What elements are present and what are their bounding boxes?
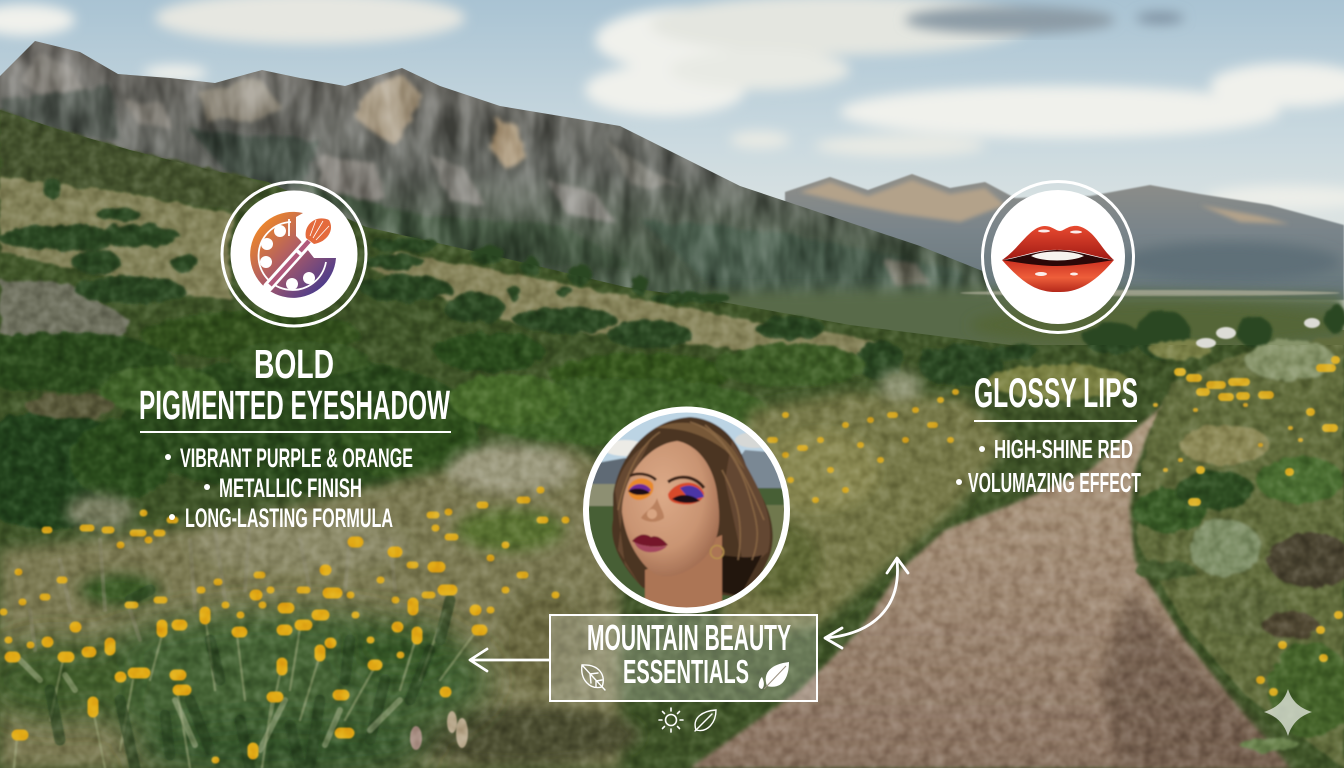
neck and shoulder (645, 535, 722, 618)
sky (0, 0, 1344, 330)
bullet list: eyeshadow features (165, 443, 413, 533)
dried seed pods (410, 711, 468, 750)
hair strands (618, 422, 764, 560)
flower plant stems and leaves (14, 520, 477, 768)
arrow: pointing left to the meadow (470, 649, 549, 671)
bullet list: eyeshadow features: METALLIC FINISH (219, 473, 362, 503)
eyeshadow (628, 478, 653, 500)
heading: bold pigmented eyeshadow: PIGMENTED EYESHADOW (139, 382, 450, 428)
panel: bold pigmented eyeshadow (139, 182, 451, 533)
lips (632, 534, 668, 547)
right bank vegetation (1132, 335, 1344, 768)
main mountain range (0, 41, 986, 302)
bullet list: lip features (956, 434, 1141, 498)
bullet list: lip features: HIGH-SHINE RED (994, 434, 1133, 464)
icon: outline leaf (582, 665, 605, 690)
icon: glossy red lips (982, 182, 1134, 332)
bullet list: eyeshadow features: VIBRANT PURPLE & ORANGE (180, 443, 413, 473)
village houses (1196, 318, 1320, 348)
nose (641, 498, 664, 522)
icon: small outline leaf (695, 710, 716, 731)
title text: ESSENTIALS (623, 653, 749, 690)
icon: makeup palette and brush (222, 182, 366, 326)
heading: bold pigmented eyeshadow (139, 341, 450, 428)
bullet list: eyeshadow features: LONG-LASTING FORMULA (185, 503, 393, 533)
hair (612, 417, 773, 596)
bullet list: lip features: VOLUMAZING EFFECT (968, 467, 1141, 498)
clouds (0, 0, 1344, 210)
sage and grass field (0, 371, 1010, 768)
heading: glossy lips: GLOSSY LIPS (974, 369, 1138, 416)
face (622, 441, 719, 576)
icon: solid leaves (759, 662, 789, 689)
yellow wildflowers (3, 360, 1339, 760)
title box: mountain beauty essentials (550, 615, 817, 701)
title text (587, 617, 791, 690)
hill bushes (0, 177, 1344, 386)
eyes (628, 489, 650, 495)
earring (710, 546, 724, 558)
upper dark hill (0, 110, 268, 212)
rock streak texture (0, 44, 986, 296)
eyebrows (630, 474, 656, 480)
arrow: curved double-headed (825, 558, 908, 648)
dirt trail (690, 392, 1290, 768)
portrait: woman with bold eye makeup (585, 408, 795, 618)
title text: MOUNTAIN BEAUTY (587, 617, 791, 658)
meadows (0, 177, 880, 362)
rocky mountain faces (0, 52, 970, 305)
icon: sparkle (1264, 689, 1312, 736)
panel: glossy lips (956, 182, 1141, 498)
valley floor (700, 288, 1344, 350)
far mountains (785, 174, 1344, 300)
heading: bold pigmented eyeshadow: BOLD (254, 341, 334, 387)
foreground green foliage (0, 610, 490, 768)
mid green scrub (0, 311, 1130, 530)
icon: sun (659, 708, 683, 732)
